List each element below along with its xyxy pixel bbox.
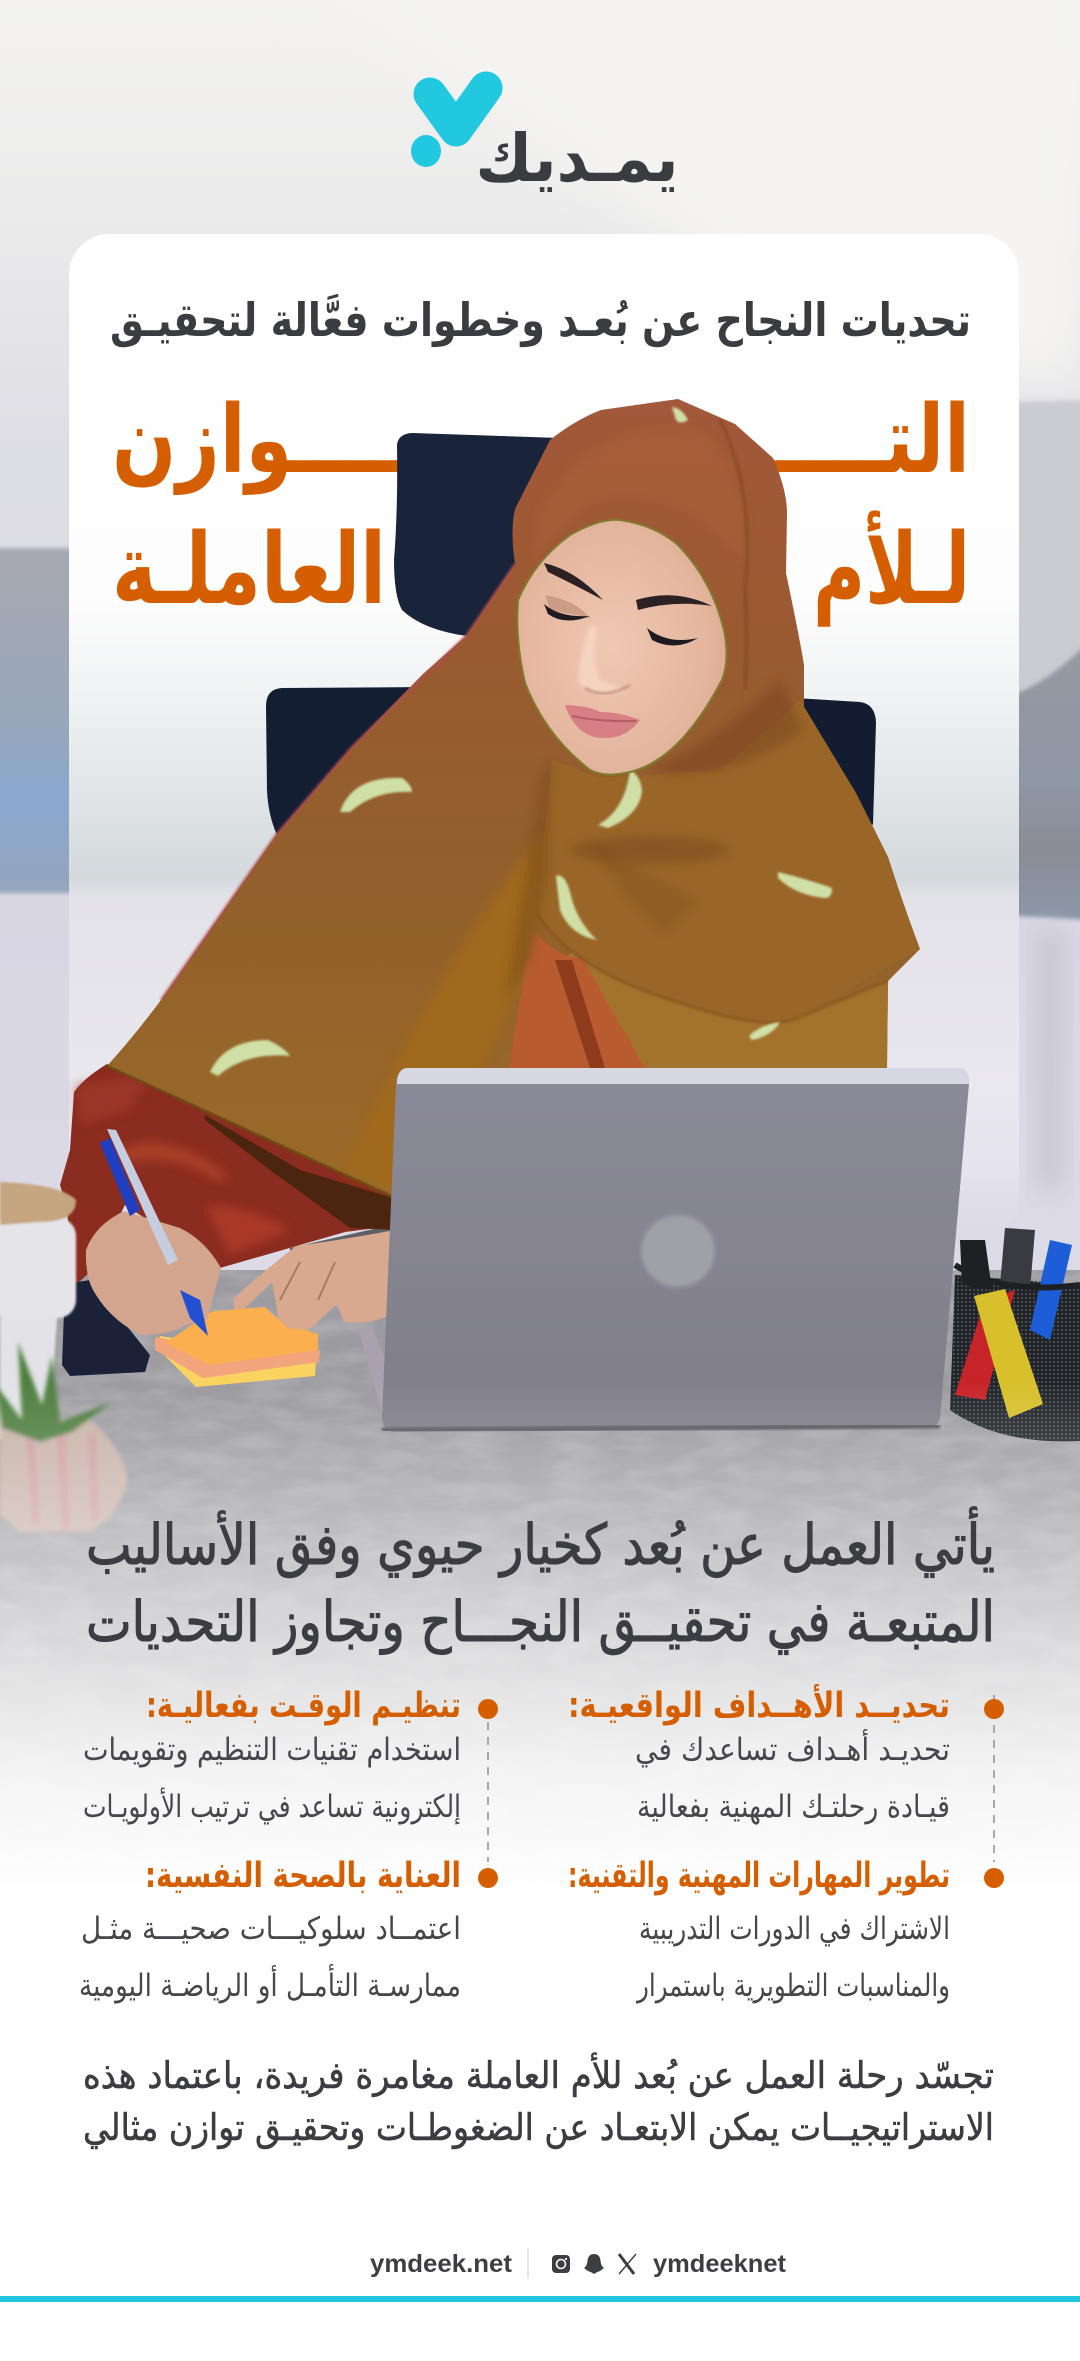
- tip: time management: [83, 1686, 498, 1825]
- scarf: long left panel highlight: [345, 830, 545, 1195]
- tip: time management: استخدام تقنيات التنظيم وتقويمات: [83, 1732, 461, 1768]
- holder: grey marker: [1000, 1228, 1035, 1290]
- tip: realistic goals: قيـادة رحلتـك المهنية بفعالية: [637, 1789, 950, 1825]
- timeline: dashed connectors: [488, 1695, 994, 1862]
- scarf: inner blouse opening: [509, 928, 645, 1068]
- tip: realistic goals: [568, 1683, 1004, 1825]
- scarf: front fold: [537, 700, 920, 1023]
- photo: hijab and scarf: [107, 399, 920, 1200]
- tip: mental health: العناية بالصحة النفسية:: [145, 1856, 461, 1896]
- scarf: fold line above hem: [537, 912, 888, 1023]
- photo: laptop: [358, 1068, 969, 1432]
- face: lip line: [572, 716, 636, 721]
- scarf: head highlight: [530, 427, 745, 570]
- tip: time management: تنظيـم الوقـت بفعاليـة:: [146, 1686, 461, 1726]
- tip: professional skills: الاشتراك في الدورات التدريبية: [639, 1911, 950, 1947]
- face: lips: [565, 705, 640, 738]
- scarf: left pink edge: [161, 564, 515, 1000]
- laptop: brand logo: [641, 1215, 715, 1287]
- heading: for the mother: لـلأم: [813, 510, 970, 628]
- photo: pencil holder: [950, 1228, 1080, 1441]
- face: right eyebrow: [636, 595, 712, 610]
- icon: instagram: [552, 2255, 570, 2273]
- scarf: head fold: [720, 420, 747, 690]
- text block: closing statement: الاستراتيجيــات يمكن الابتعـاد عن الضغوطـات وتحقيـق توازن مثالي: [83, 2106, 994, 2149]
- scarf: hem line: [107, 1066, 400, 1200]
- scarf: central tuck shadow: [590, 840, 700, 935]
- photo: phone: [62, 1280, 150, 1376]
- face: left eye: [544, 604, 590, 621]
- photo: pen: [100, 1129, 208, 1336]
- icon: snapchat: [584, 2254, 604, 2274]
- tip: realistic goals: تحديـد أهـداف تساعدك في: [635, 1729, 950, 1768]
- holder: rim: [955, 1265, 1080, 1288]
- panel: white headline card: [69, 234, 1019, 1240]
- scarf: neck shadow: [570, 836, 730, 864]
- photo: potted plant: [0, 1342, 127, 1532]
- photo: woman sleeve: [60, 1064, 400, 1285]
- tip: professional skills: [568, 1856, 1004, 2004]
- tip: mental health: اعتمــاد سلوكيـــات صحيـــة مثـل: [81, 1911, 461, 1947]
- logo: ymdeek check mark and wordmark: يمـديك: [476, 120, 678, 197]
- photo: desk surface: [0, 1270, 1080, 1940]
- footer: divider: [528, 2248, 529, 2278]
- logo: ymdeek check mark and wordmark: [411, 88, 678, 197]
- text block: closing statement: [83, 2052, 994, 2149]
- photo: face: [517, 520, 727, 775]
- footer: website: ymdeek.net: [370, 2250, 513, 2278]
- photo: ceramic cup with wooden lid: [0, 1182, 76, 1440]
- scarf: under chin shadow: [650, 680, 803, 775]
- holder: black marker: [960, 1240, 992, 1290]
- face: eye shadow: [545, 595, 590, 618]
- background: blurred office wall: [0, 0, 1080, 1400]
- photo: grey strip under forearm: [290, 1224, 395, 1290]
- photo: sticky notes: [155, 1307, 320, 1387]
- face: nose shadow: [585, 685, 630, 693]
- text block: closing statement: تجسّد رحلة العمل عن بُعد للأم العاملة مغامرة فريدة، باعتماد هذه: [83, 2052, 994, 2097]
- tip: realistic goals: تحديــد الأهــداف الواقعيـة:: [568, 1683, 950, 1726]
- footer: cyan bar: [0, 2296, 1080, 2302]
- heading: working: العاملـة: [112, 513, 386, 627]
- face: right eye: [647, 628, 698, 646]
- face: nose highlight: [579, 625, 625, 694]
- face: left eyebrow: [544, 563, 603, 600]
- scarf: centre shadow: [505, 760, 552, 1000]
- photo: fade to white: [0, 1380, 1080, 2361]
- holder: red marker: [955, 1290, 1015, 1400]
- holder: yellow highlighter: [974, 1289, 1043, 1418]
- tip: mental health: [79, 1856, 498, 2004]
- holder: blue pen: [1030, 1240, 1072, 1340]
- text block: main statement: [86, 1506, 995, 1655]
- tip: mental health: ممارسـة التأمـل أو الرياضـة اليومية: [79, 1964, 461, 2004]
- photo: office chair: [266, 433, 876, 835]
- icon: x: [619, 2254, 636, 2274]
- footer: social handle: ymdeeknet: [653, 2250, 787, 2278]
- photo: writing hand: [86, 1211, 221, 1335]
- bottom white area: [0, 1900, 1080, 2361]
- photo: right hand: [234, 1230, 395, 1331]
- scarf: lower right drape: [560, 935, 888, 1068]
- feather motifs: [210, 407, 832, 1076]
- tip: professional skills: والمناسبات التطويرية باستمرار: [635, 1968, 950, 2004]
- tip: time management: إلكترونية تساعد في ترتيب الأولويـات: [83, 1787, 461, 1825]
